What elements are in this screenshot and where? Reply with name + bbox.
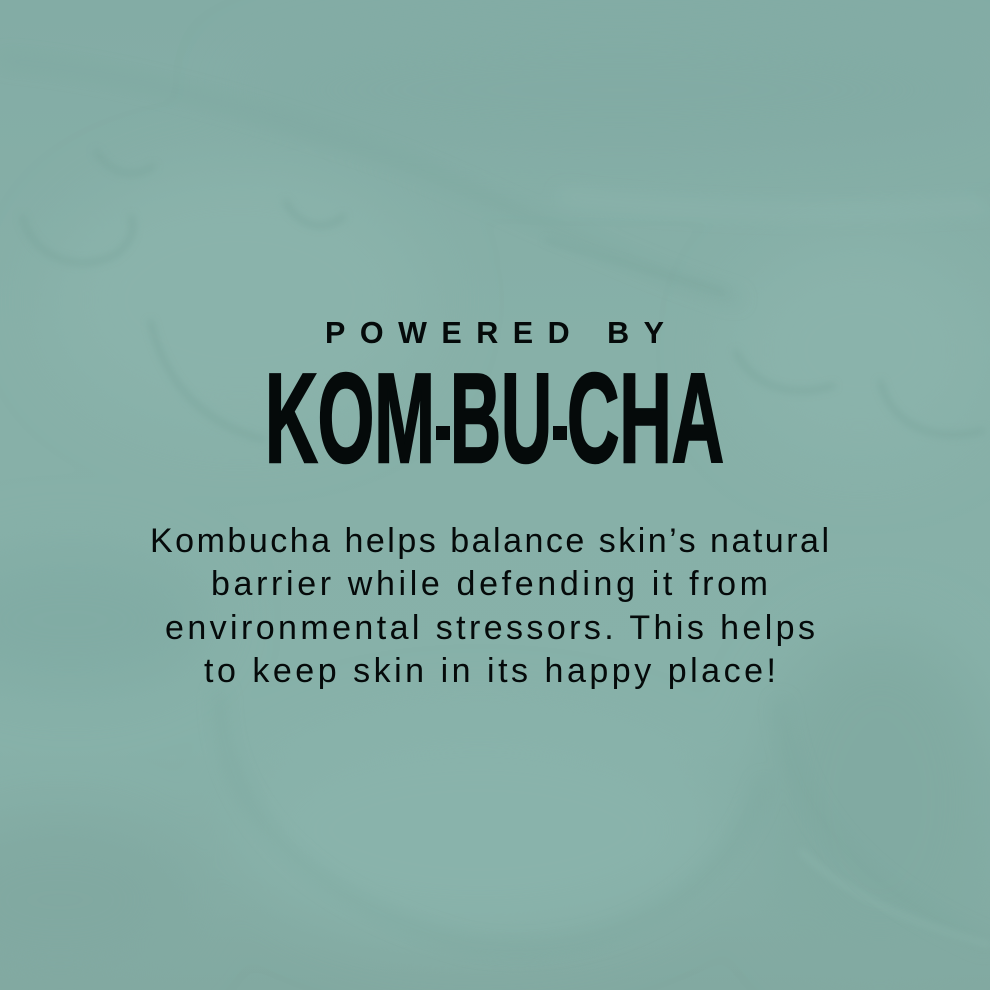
eyebrow: POWERED BY: POWERED BY <box>325 316 664 350</box>
logotype: KOM-BU-CHA: BU <box>450 347 552 489</box>
logotype: KOM-BU-CHA <box>265 347 724 489</box>
logotype: KOM-BU-CHA: KOM <box>265 347 435 489</box>
body text: Kombucha helps balance skin’s natural <box>150 522 829 560</box>
body text: environmental stressors. This helps <box>165 609 815 647</box>
logotype: KOM-BU-CHA: CHA <box>567 347 724 489</box>
body text: barrier while defending it from <box>211 565 768 603</box>
body text: to keep skin in its happy place! <box>204 652 776 690</box>
body text <box>150 522 829 690</box>
